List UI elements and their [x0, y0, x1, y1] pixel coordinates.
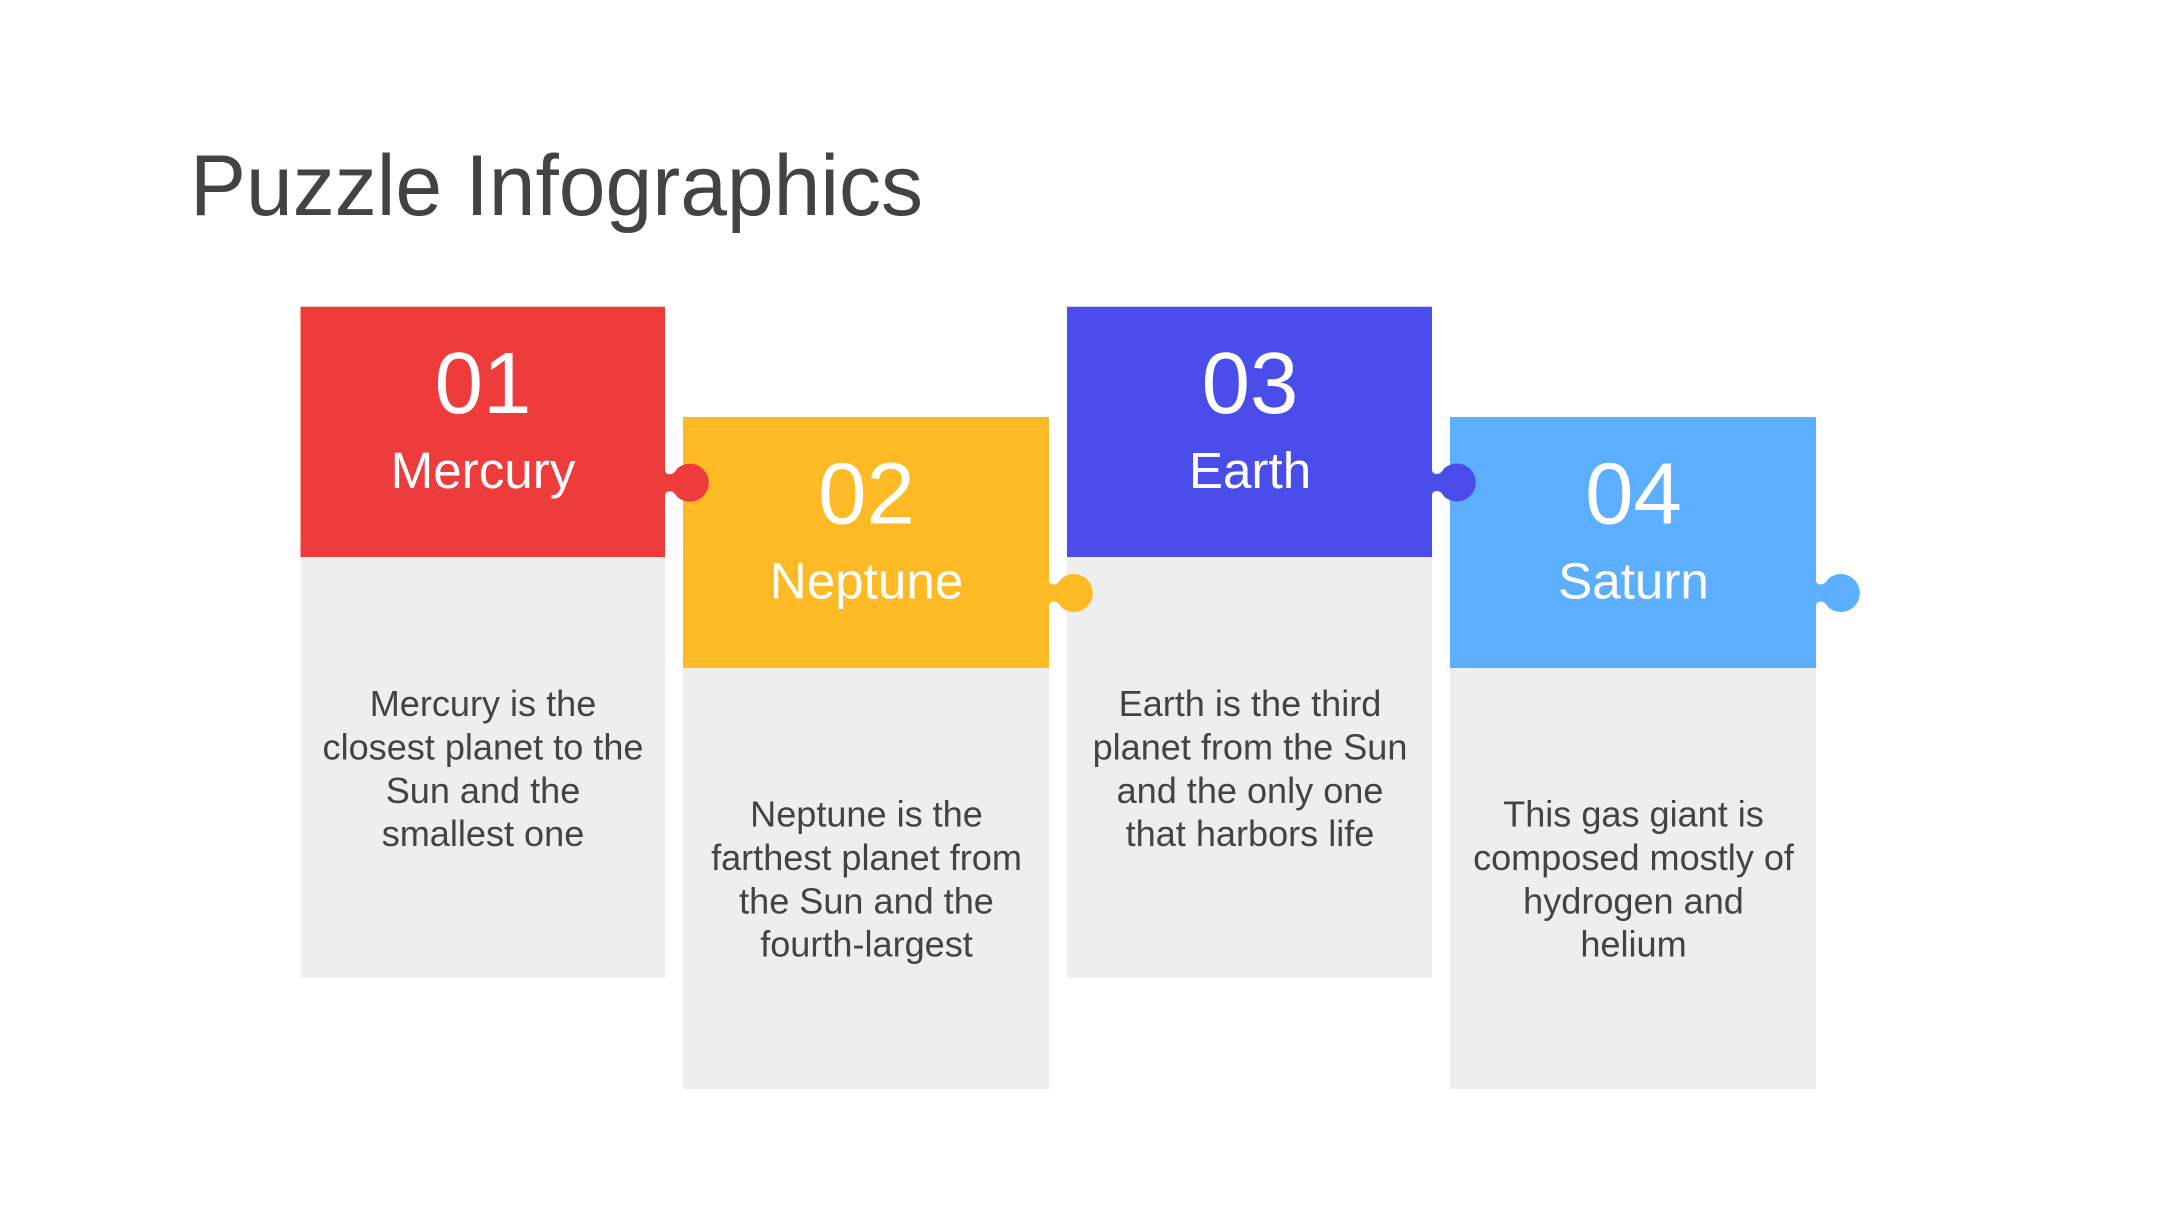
panel: 04 Saturn [1450, 417, 1860, 1089]
description: Saturn: This gas giant is [1503, 794, 1764, 835]
description: Saturn: hydrogen and [1523, 880, 1744, 921]
description: Earth: planet from the Sun [1093, 726, 1407, 768]
number: 03: 03 [1202, 335, 1298, 432]
description: Mercury: Sun and the [386, 770, 580, 811]
description: Neptune: the Sun and the [739, 880, 994, 921]
description: Mercury: smallest one [382, 813, 584, 854]
header block: Mercury with puzzle knob [300, 307, 709, 557]
panel: 02 Neptune [683, 417, 1093, 1089]
header block: Earth with puzzle knob [1067, 307, 1476, 557]
header block: Neptune with puzzle knob [683, 417, 1093, 668]
description: Neptune: farthest planet from [711, 837, 1022, 878]
body card: Neptune [683, 667, 1049, 1089]
body card: Earth [1067, 556, 1432, 978]
description: Neptune: Neptune is the [750, 794, 983, 835]
body card: Mercury [300, 556, 665, 978]
description: Earth: Earth is the third [1119, 683, 1381, 724]
number: 01: 01 [435, 335, 531, 432]
description: Mercury: Mercury is the [370, 683, 596, 724]
description: Earth: that harbors life [1126, 813, 1374, 854]
description: Neptune: fourth-largest [760, 924, 973, 965]
name: Earth: Earth [1189, 442, 1311, 499]
description: Mercury: closest planet to the [323, 726, 643, 768]
panel: 01 Mercury [300, 307, 709, 978]
body card: Saturn [1450, 667, 1816, 1089]
header block: Saturn with puzzle knob [1450, 417, 1860, 668]
number: 04: 04 [1585, 446, 1682, 542]
description: Saturn: helium [1580, 924, 1687, 965]
name: Mercury: Mercury [391, 442, 576, 499]
number: 02: 02 [818, 446, 915, 542]
description: Earth: and the only one [1117, 770, 1383, 811]
name: Saturn: Saturn [1558, 552, 1709, 610]
description: Saturn: composed mostly of [1473, 837, 1795, 878]
name: Neptune: Neptune [770, 552, 963, 610]
title: Puzzle Infographics [190, 138, 923, 234]
panel: 03 Earth [1067, 307, 1476, 978]
